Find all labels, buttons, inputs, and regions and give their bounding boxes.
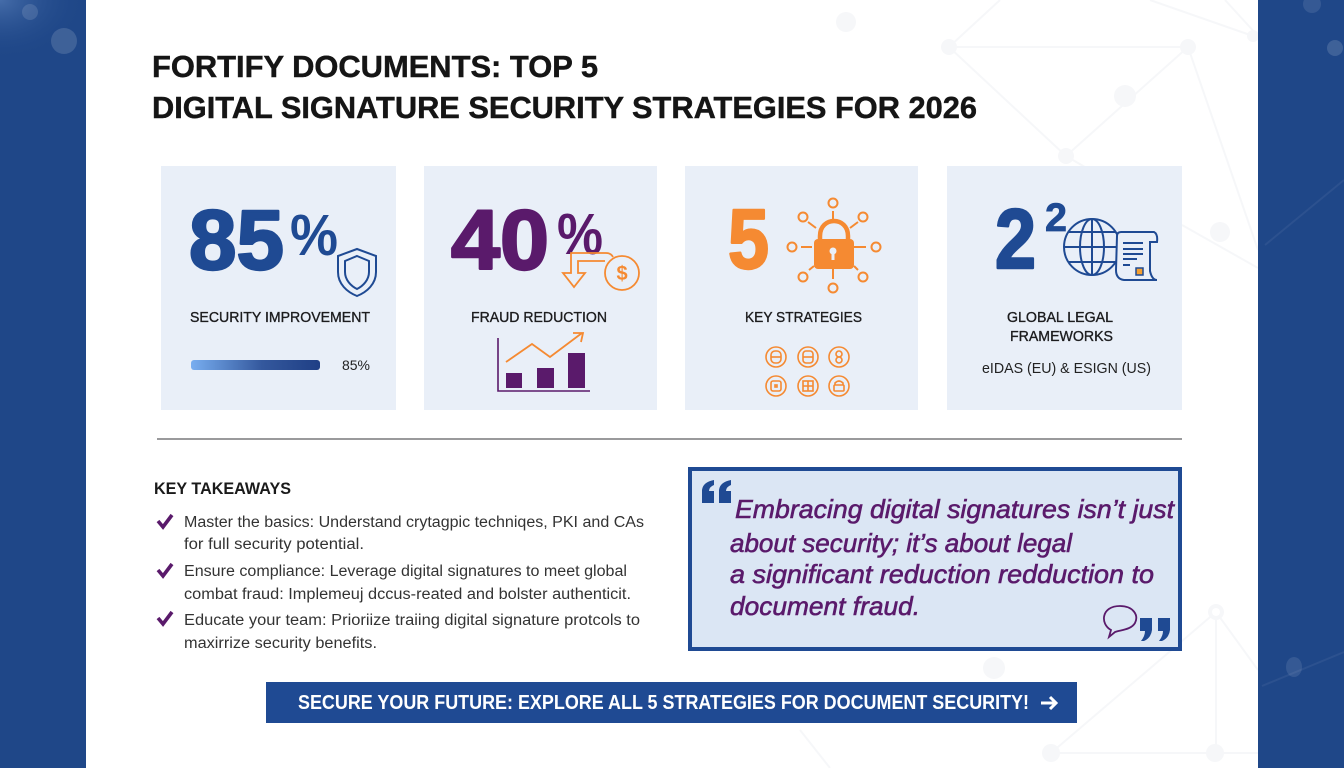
takeaway 3: maxirrize security benefits.	[184, 635, 377, 652]
label	[1007, 309, 1113, 345]
text block: takeaways list	[158, 514, 644, 652]
heading: key takeaways: KEY TAKEAWAYS	[154, 480, 291, 498]
stat: 85%: 85	[189, 193, 284, 287]
takeaway 3: Educate your team: Prioriize traiing digital signature protcols to	[184, 612, 640, 629]
panel: fraud reduction	[424, 166, 657, 410]
icon: check 1	[158, 515, 172, 527]
stat: 85%: %	[290, 203, 338, 268]
right blue side panel	[1258, 0, 1344, 768]
icon: opening quote	[702, 480, 731, 503]
icon: check 3	[158, 612, 172, 624]
title	[152, 49, 977, 125]
takeaway 1: Master the basics: Understand crytagpic techniqes, PKI and CAs	[184, 514, 644, 531]
icon: arrow	[1041, 697, 1056, 709]
icons: six strategy badges	[766, 347, 849, 396]
icon: closing quote	[1140, 618, 1170, 641]
label: FRAUD REDUCTION	[471, 309, 607, 326]
panel: global legal frameworks	[947, 166, 1182, 410]
quote text: a significant reduction redduction to	[730, 559, 1154, 589]
stat: 40%	[451, 193, 603, 287]
panel: quote callout	[690, 469, 1180, 649]
left blue side panel	[0, 0, 86, 768]
bar chart	[498, 333, 590, 391]
stat: 2 squared: 2	[1045, 196, 1067, 240]
label: GLOBAL LEGAL	[1007, 309, 1113, 326]
stat: 5: 5	[728, 192, 769, 286]
stat: 40%: 40	[451, 193, 549, 287]
label: SECURITY IMPROVEMENT	[190, 309, 370, 326]
panel: security improvement	[161, 166, 396, 410]
takeaway 1	[184, 514, 644, 553]
takeaway 3	[184, 612, 640, 652]
icon: check 2	[158, 564, 172, 576]
takeaway 2	[184, 563, 631, 603]
icon: down arrow and dollar	[563, 253, 639, 290]
title: FORTIFY DOCUMENTS: TOP 5	[152, 49, 598, 84]
icon: shield	[338, 249, 376, 296]
background network pattern	[800, 0, 1259, 768]
call to action banner	[266, 682, 1077, 723]
stat: 40%: %	[557, 202, 603, 267]
quote text: Embracing digital signatures isn’t just	[735, 494, 1176, 524]
icon: speech bubble	[1104, 606, 1136, 637]
label: FRAMEWORKS	[1010, 328, 1113, 345]
takeaway 1: for full security potential.	[184, 536, 364, 553]
takeaway 2: combat fraud: Implemeuj dccus-reated and bolster authenticit.	[184, 586, 631, 603]
quote text	[730, 494, 1176, 621]
quote text: about security; it’s about legal	[730, 528, 1073, 558]
stat: 2 squared: 2	[995, 192, 1036, 286]
icon: down arrow and dollar: $	[616, 263, 628, 285]
panel: key strategies	[685, 166, 918, 410]
banner text: SECURE YOUR FUTURE: EXPLORE ALL 5 STRATEGIES FOR DOCUMENT SECURITY!	[298, 692, 1029, 714]
label: KEY STRATEGIES	[745, 309, 862, 326]
icon: padlock network	[788, 198, 880, 292]
stat: 85%	[189, 193, 338, 287]
title: DIGITAL SIGNATURE SECURITY STRATEGIES FOR 2026	[152, 90, 977, 125]
progress bar	[191, 360, 320, 370]
quote text: document fraud.	[730, 591, 920, 621]
stat: 2 squared	[995, 192, 1067, 286]
icon: globe and scroll	[1064, 219, 1157, 280]
frameworks text: eIDAS (EU) & ESIGN (US)	[982, 360, 1151, 377]
progress value: 85%	[342, 357, 370, 373]
takeaway 2: Ensure compliance: Leverage digital signatures to meet global	[184, 563, 627, 580]
